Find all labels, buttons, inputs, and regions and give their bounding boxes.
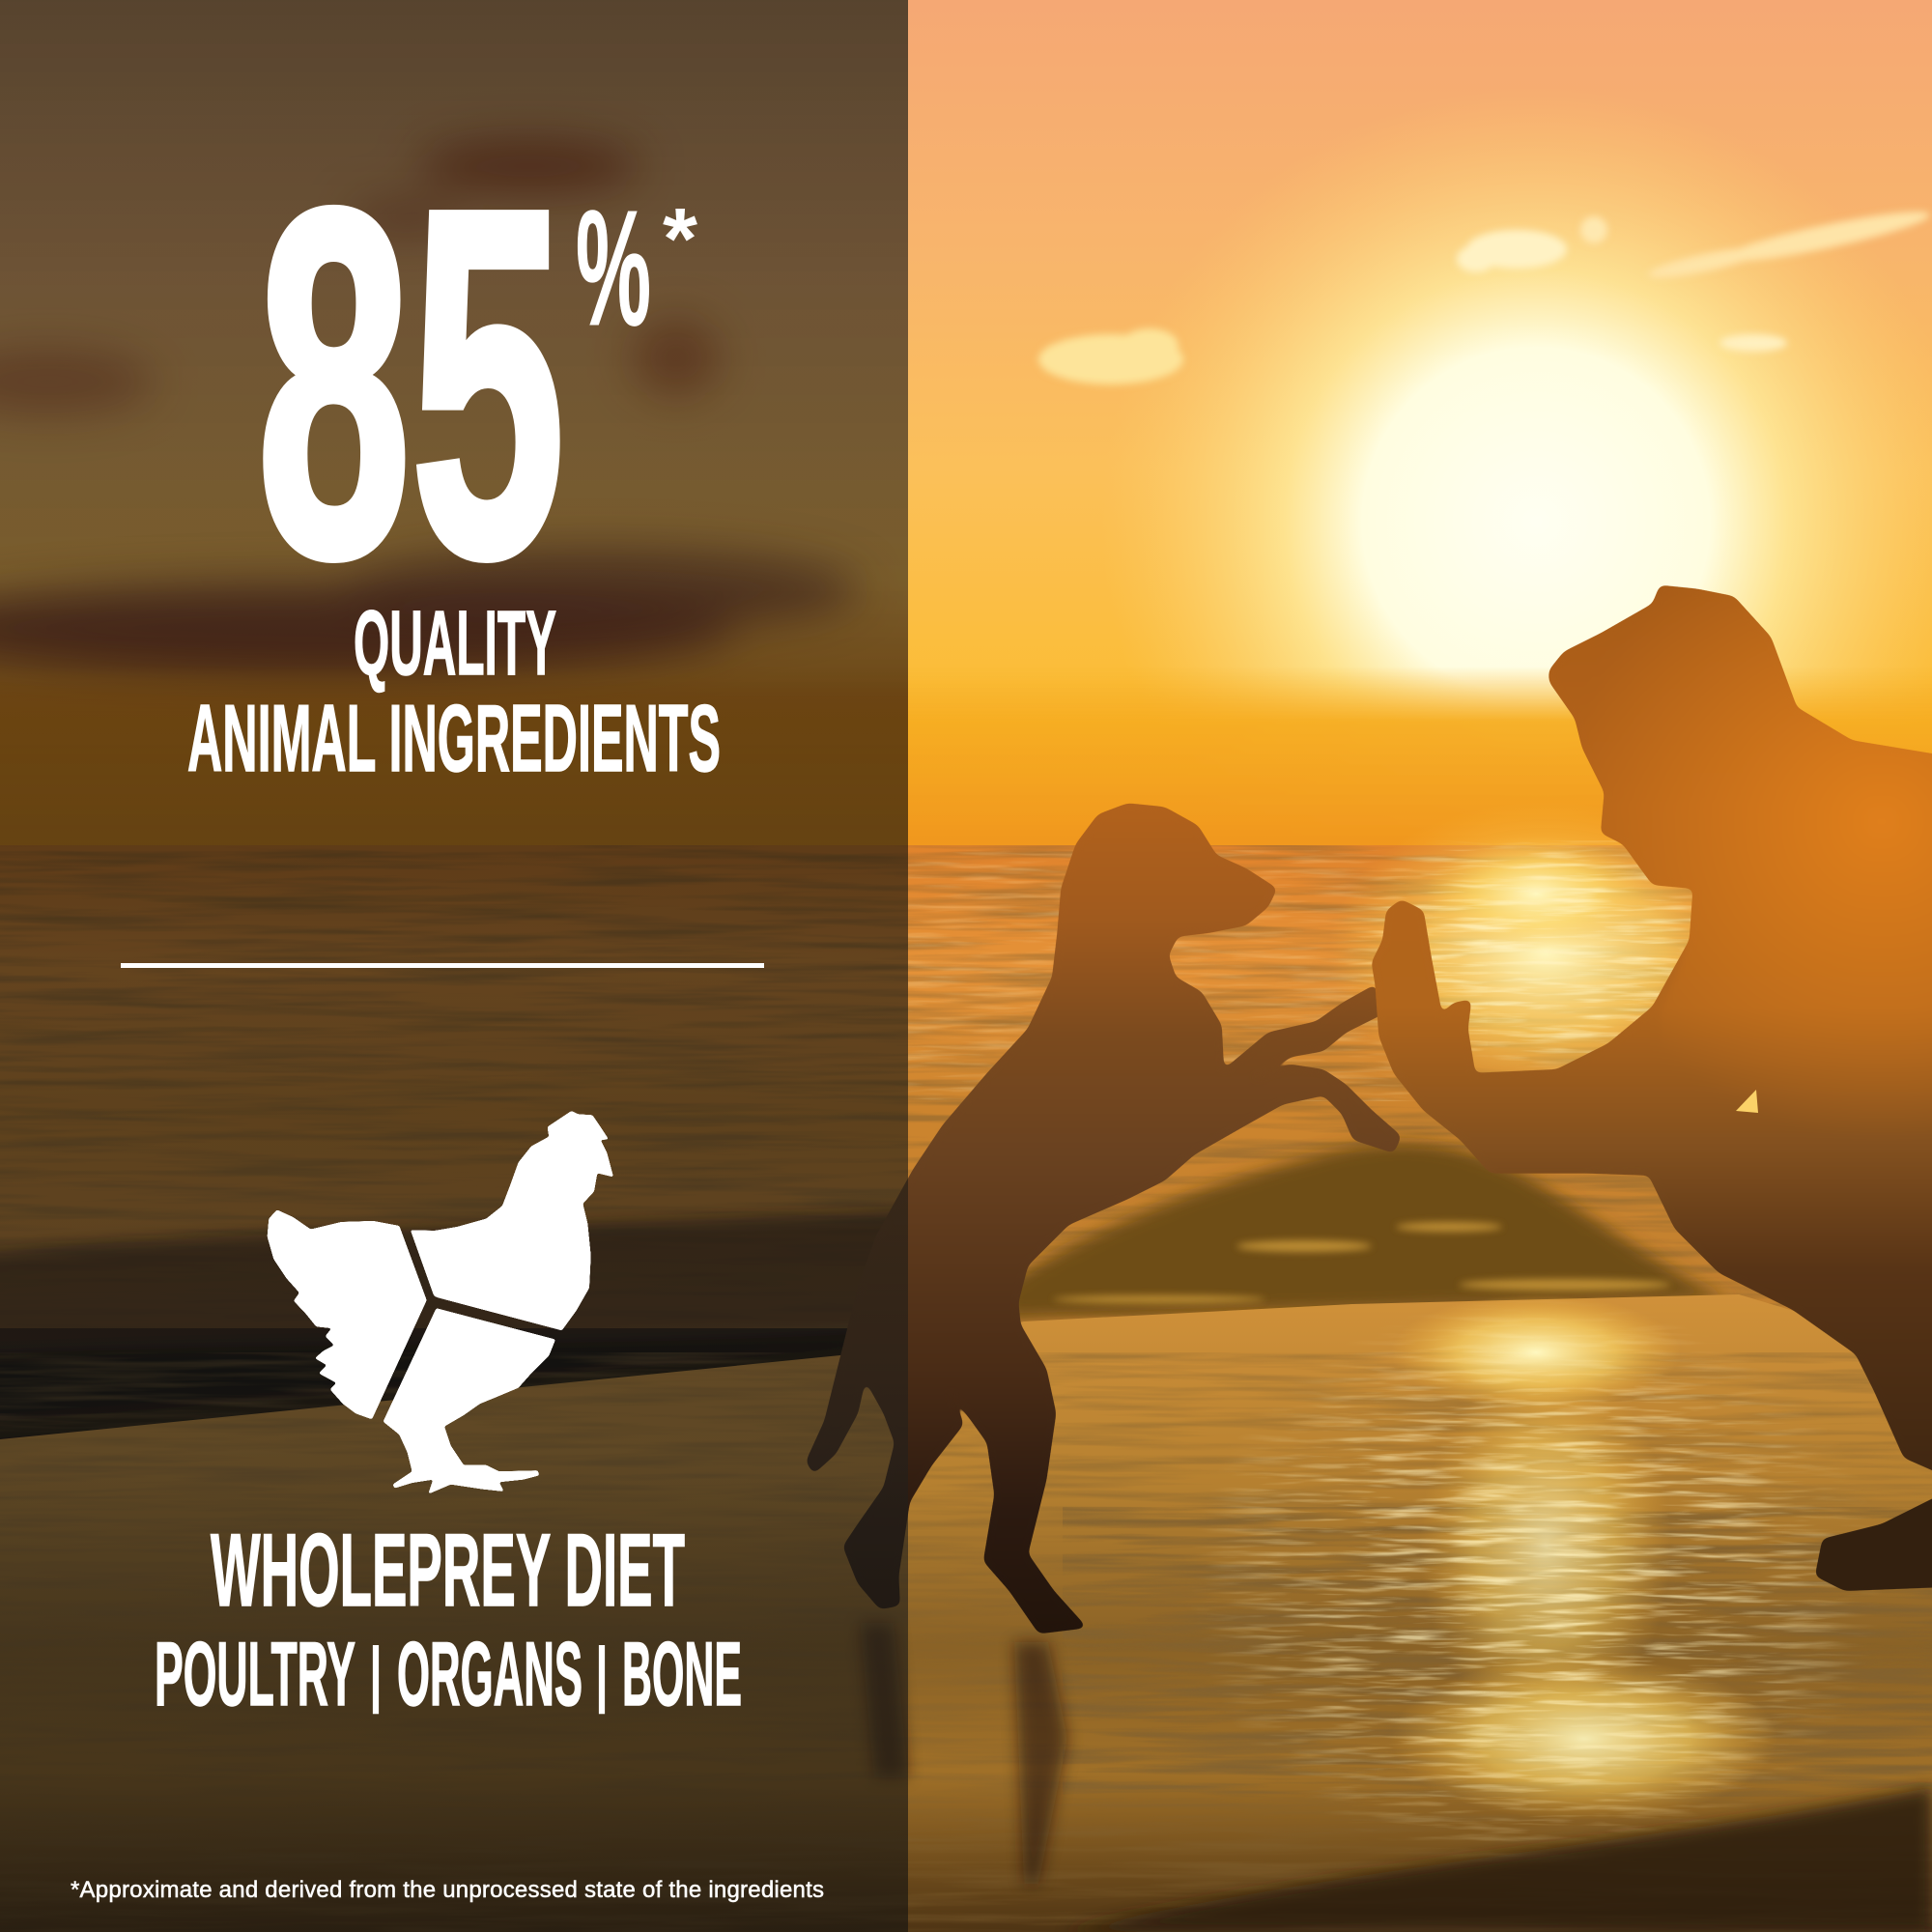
icon: chicken divided into three sections: [268, 1111, 613, 1494]
man's boot: [1815, 1494, 1932, 1591]
number 85: 85: [257, 108, 565, 658]
sun reflection on sand: [1391, 1294, 1681, 1410]
dark foreshore: [1063, 1787, 1932, 1932]
left dark translucent panel: [0, 0, 908, 1932]
asterisk: *: [663, 191, 697, 288]
percent sign: %: [576, 177, 651, 360]
heading: quality animal ingredients: QUALITY: [354, 592, 556, 695]
photo: man silhouette: [1372, 585, 1932, 1591]
sea and waves: [0, 845, 1932, 1328]
dark clouds behind panel: [0, 139, 860, 674]
subheading: poultry, organs, bone: |: [366, 1633, 385, 1715]
subheading: poultry, organs, bone: |: [592, 1633, 611, 1715]
divider line: [121, 963, 764, 968]
heading: quality animal ingredients: [187, 592, 721, 791]
sky clouds: [1038, 203, 1932, 384]
footnote: *Approximate and derived from the unprocessed state of the ingredients: [71, 1877, 824, 1903]
wave foam glints: [1053, 1222, 1671, 1303]
heading: wholeprey diet: WHOLEPREY DIET: [211, 1512, 685, 1628]
subheading: poultry, organs, bone: POULTRY: [155, 1623, 355, 1724]
infographic canvas: BONE: [622, 1623, 742, 1724]
headline stat: 85%*: [257, 108, 697, 658]
heading: quality animal ingredients: ANIMAL INGREDIENTS: [187, 685, 721, 791]
wet sand beach: [0, 1294, 1932, 1932]
gap of sky under man's arm: [1736, 1090, 1758, 1113]
dog reflection: [860, 1623, 1067, 1884]
photo: dog silhouette: [806, 804, 1402, 1634]
subheading: poultry, organs, bone: ORGANS: [397, 1623, 582, 1724]
horizon band: [0, 667, 1932, 850]
